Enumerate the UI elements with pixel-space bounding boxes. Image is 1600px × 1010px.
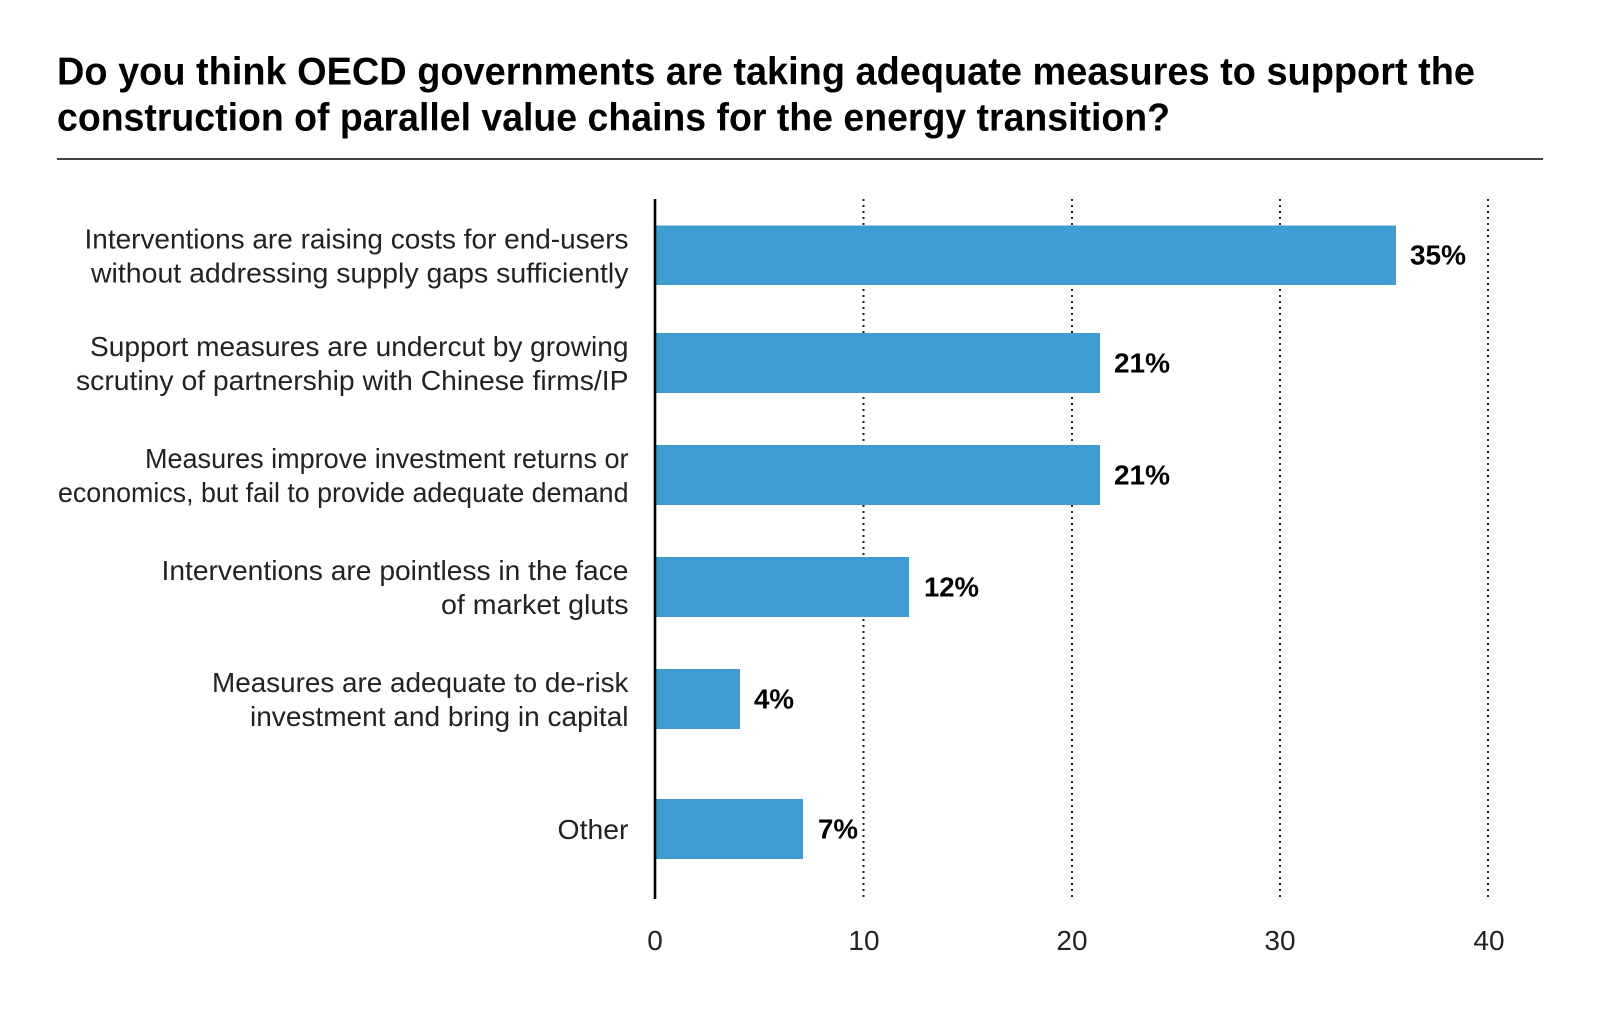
title <box>57 50 1475 140</box>
category labels: without addressing supply gaps sufficiently <box>90 258 628 288</box>
category labels: scrutiny of partnership with Chinese firms/IP <box>76 365 628 396</box>
category labels: Other <box>558 814 628 845</box>
value labels: 4% <box>754 684 794 714</box>
value labels: 7% <box>818 814 858 844</box>
category labels: of market gluts <box>441 589 628 620</box>
x axis labels <box>647 925 1505 956</box>
bar chart <box>58 199 1505 956</box>
value labels: 21% <box>1114 460 1170 490</box>
category labels: Measures are adequate to de-risk <box>212 667 629 698</box>
title: construction of parallel value chains for the energy transition? <box>57 96 1170 140</box>
value labels <box>754 240 1466 844</box>
title: Do you think OECD governments are taking adequate measures to support the <box>57 50 1475 94</box>
category labels <box>58 224 629 845</box>
category labels: investment and bring in capital <box>250 701 628 732</box>
category labels: Support measures are undercut by growing <box>90 331 628 362</box>
category labels: Interventions are raising costs for end-users <box>84 224 628 254</box>
value labels: 35% <box>1410 240 1466 270</box>
x axis labels: 10 <box>848 925 880 956</box>
category labels: Measures improve investment returns or <box>145 443 628 474</box>
value labels: 21% <box>1114 348 1170 378</box>
category labels: economics, but fail to provide adequate demand <box>58 477 628 508</box>
bars <box>656 226 1396 859</box>
category labels: Interventions are pointless in the face <box>162 555 628 586</box>
x axis labels: 20 <box>1056 925 1088 956</box>
x axis labels: 40 <box>1473 925 1505 956</box>
x axis labels: 30 <box>1264 925 1296 956</box>
x axis labels: 0 <box>647 925 663 956</box>
value labels: 12% <box>924 572 979 602</box>
